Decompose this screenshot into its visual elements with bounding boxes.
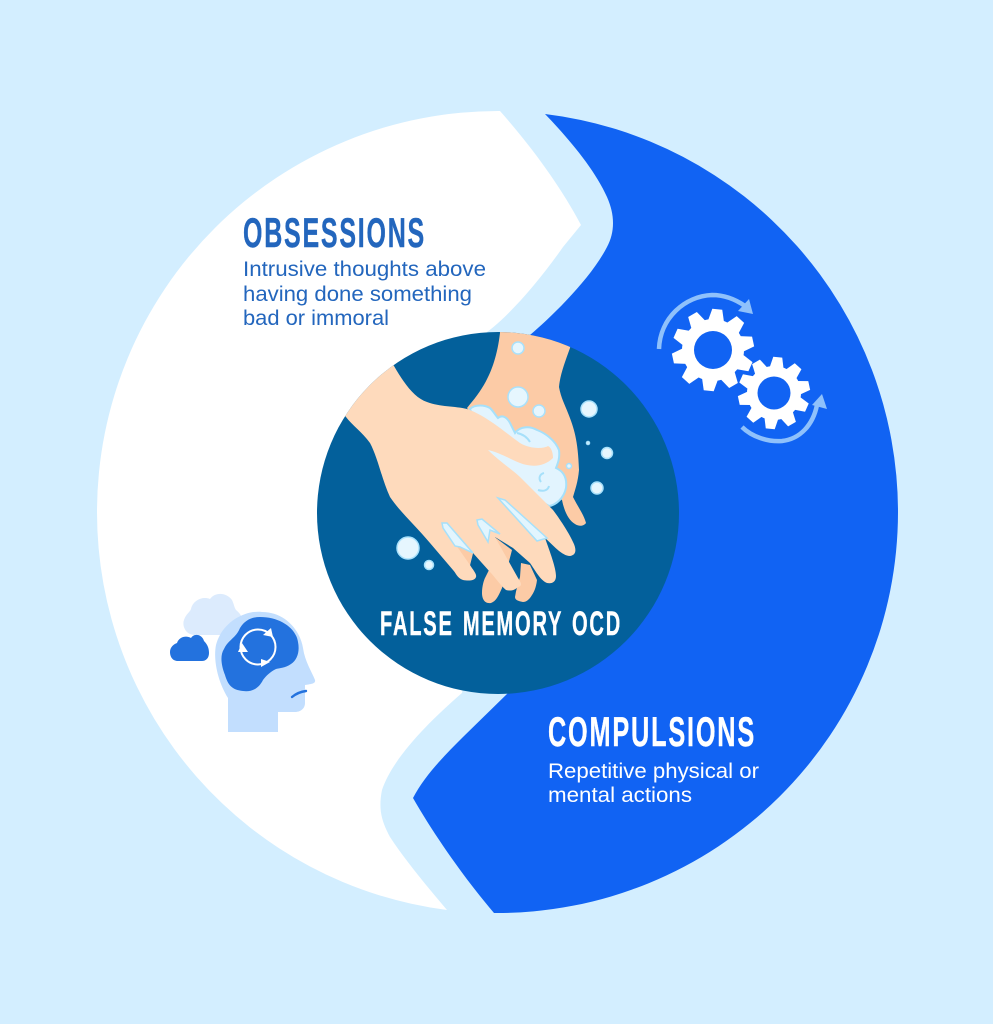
illustration: hands washing (345, 332, 586, 604)
foam detail (517, 433, 549, 491)
icon: head (215, 612, 315, 732)
icon: dark cloud (170, 635, 209, 661)
icon: small gear (737, 356, 811, 430)
soap bubbles (397, 342, 612, 570)
back fingers (482, 535, 537, 603)
center circle (317, 332, 679, 694)
icon: head with brain and clouds (170, 594, 315, 732)
text: compulsions description (548, 760, 759, 807)
soap foam (470, 406, 566, 506)
icon: brain (221, 617, 299, 691)
icon: cycle arrows (238, 628, 276, 667)
icon: frown (292, 691, 306, 697)
icon: light cloud (183, 594, 243, 635)
front hand (345, 366, 576, 590)
panel: compulsions blue segment (413, 114, 898, 913)
text: compulsions description: Repetitive physical or (548, 760, 759, 783)
center title: FALSE MEMORY OCD (380, 605, 622, 643)
icon: large gear (671, 308, 755, 392)
arrow: lower rotation (742, 394, 827, 441)
heading: obsessions: OBSESSIONS (243, 209, 426, 256)
text: obsessions description: Intrusive thoughts above (243, 258, 486, 281)
finger shadows (458, 548, 473, 565)
heading: compulsions: COMPULSIONS (548, 708, 756, 755)
arrow: upper rotation (659, 295, 753, 349)
back hand (467, 320, 586, 526)
text: obsessions description (243, 258, 486, 330)
icon: gears with arrows (659, 295, 827, 441)
text: compulsions description: mental actions (548, 784, 692, 807)
finger highlights (442, 498, 547, 553)
text: obsessions description: having done something (243, 283, 472, 306)
panel: obsessions white segment (97, 111, 581, 910)
text: obsessions description: bad or immoral (243, 307, 389, 330)
